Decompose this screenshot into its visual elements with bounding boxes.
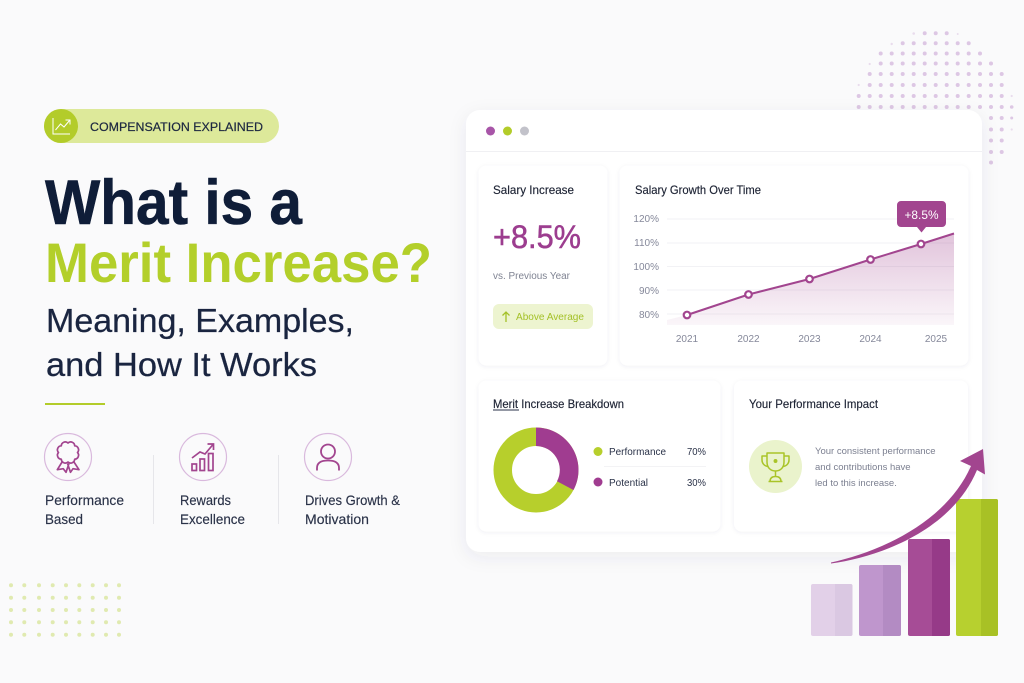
panel: your performance impact: Your consistent performance — [815, 446, 936, 457]
feature: performance based: Performance — [45, 492, 124, 508]
panel: salary growth chart — [620, 166, 968, 366]
dot pattern: top right — [857, 31, 1014, 164]
panel: salary increase — [478, 166, 608, 366]
feature: drives growth and motivation: Motivation — [305, 511, 369, 527]
icon: trophy — [762, 453, 789, 482]
line chart: 110% — [634, 238, 659, 249]
icon: award ribbon — [57, 442, 79, 472]
panel: salary growth chart: Salary Growth Over Time — [635, 183, 761, 197]
line chart: 100% — [633, 262, 659, 273]
growth bars — [811, 499, 998, 636]
title: Meaning, Examples, — [46, 302, 354, 339]
line chart: 2023 — [798, 334, 821, 345]
legend — [594, 447, 706, 489]
legend: Performance — [609, 447, 666, 458]
legend: 30% — [687, 478, 706, 489]
donut chart — [503, 428, 578, 503]
panel: your performance impact: Your Performance Impact — [749, 397, 879, 411]
line chart: 2025 — [925, 334, 948, 345]
badge: compensation explained: COMPENSATION EXPLAINED — [90, 120, 263, 134]
title: What is a — [45, 168, 303, 238]
badge: compensation explained — [44, 109, 279, 143]
feature: rewards excellence: Rewards — [180, 492, 231, 508]
panel: your performance impact: led to this increase. — [815, 478, 897, 489]
line chart — [633, 201, 954, 345]
dashboard window — [466, 110, 982, 552]
panel: your performance impact: and contributions have — [815, 462, 911, 473]
legend: Potential — [609, 478, 648, 489]
callout: +8.5% — [897, 201, 946, 232]
panel: merit increase breakdown — [478, 380, 720, 532]
panel: merit increase breakdown: Merit Increase Breakdown — [493, 397, 624, 411]
callout: +8.5%: +8.5% — [904, 208, 939, 222]
arrow: upward growth — [831, 449, 985, 564]
panel: your performance impact — [734, 380, 968, 532]
line chart: 80% — [639, 310, 659, 321]
line chart: 2021 — [676, 334, 699, 345]
line chart: 2024 — [859, 334, 882, 345]
bar 3 — [908, 539, 950, 636]
panel: salary increase: Salary Increase — [493, 183, 574, 197]
bar 1 — [811, 584, 852, 636]
badge: above average — [493, 304, 593, 329]
title: Merit Increase? — [45, 231, 432, 294]
dot pattern: bottom left — [9, 583, 121, 637]
feature: drives growth and motivation: Drives Growth & — [305, 492, 401, 508]
feature: rewards excellence: Excellence — [180, 511, 245, 527]
panel: salary increase: vs. Previous Year — [493, 271, 571, 282]
title: and How It Works — [46, 346, 317, 383]
feature: drives growth and motivation — [304, 434, 401, 527]
window controls — [486, 126, 529, 136]
badge: above average: Above Average — [516, 312, 584, 323]
title — [45, 168, 432, 383]
bar 4 — [956, 499, 998, 636]
bar 2 — [859, 565, 901, 636]
line chart: 90% — [639, 286, 659, 297]
icon: person — [317, 444, 339, 470]
feature: rewards excellence — [180, 434, 245, 527]
legend: 70% — [687, 447, 706, 458]
icon: growth bars — [192, 444, 214, 470]
panel: salary increase: +8.5% — [493, 219, 581, 255]
line chart: 2022 — [737, 334, 760, 345]
feature: performance based — [44, 434, 124, 527]
feature: performance based: Based — [45, 511, 83, 527]
line chart: 120% — [633, 214, 659, 225]
